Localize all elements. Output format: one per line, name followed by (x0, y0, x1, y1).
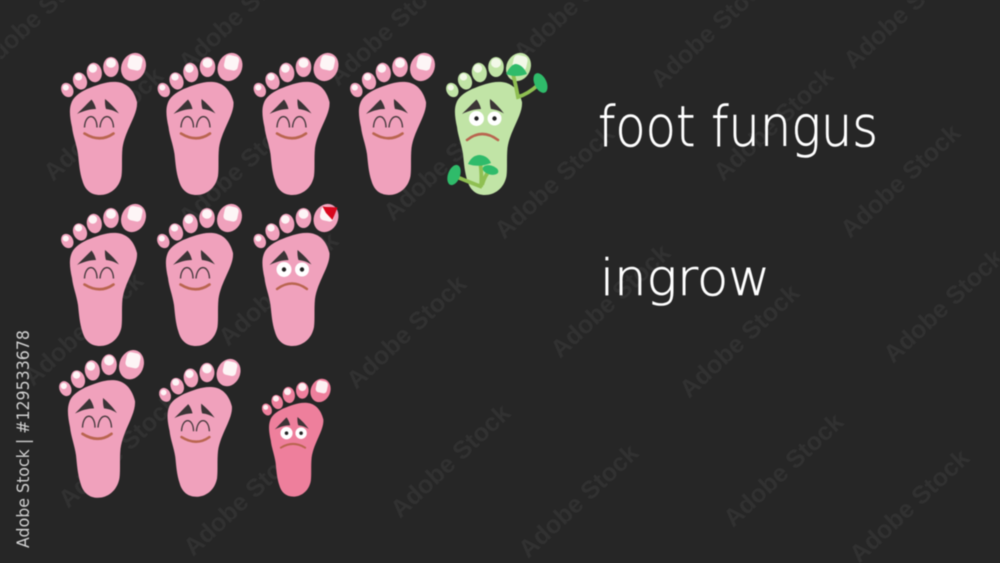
watermark pattern: Adobe Stock (674, 279, 805, 403)
label: foot fungus: foot fungus (598, 95, 878, 160)
foot row 2 column 2: happy (155, 200, 247, 346)
watermark pattern: Adobe Stock (545, 239, 676, 363)
foot row 2 column 1: happy (59, 200, 151, 346)
foot row 1 column 1: happy (59, 49, 151, 195)
watermark pattern: Adobe Stock (53, 389, 184, 513)
watermark pattern: Adobe Stock (378, 102, 509, 226)
watermark pattern: Adobe Stock (38, 62, 169, 186)
watermark pattern: Adobe Stock (835, 119, 966, 243)
watermark pattern: Adobe Stock (18, 267, 149, 391)
mushroom on big toe (506, 64, 550, 97)
watermark pattern: Adobe Stock (489, 120, 620, 244)
watermark pattern: Adobe Stock (718, 408, 849, 532)
watermark pattern: Adobe Stock (385, 399, 516, 523)
foot row 1 column 4: happy (348, 49, 440, 195)
red nail (322, 206, 338, 220)
foot row 3 column 2: happy (157, 355, 245, 497)
watermark pattern: Adobe Stock (178, 437, 309, 561)
stock id text: Adobe Stock | #129533678 (14, 330, 33, 548)
label: ingrow: ingrow (600, 249, 770, 307)
foot row 1 column 3: happy (251, 49, 343, 195)
small inflamed foot: sad (260, 375, 334, 497)
foot with fungus: green and sad (444, 49, 550, 195)
watermark pattern: Adobe Stock (341, 270, 472, 394)
watermark pattern: Adobe Stock (708, 62, 839, 186)
foot row 1 column 2: happy (155, 49, 247, 195)
watermark pattern: Adobe Stock (513, 439, 644, 563)
watermark pattern: Adobe Stock (213, 227, 344, 351)
watermark pattern: Adobe Stock (173, 107, 304, 231)
mushrooms on heel (445, 155, 499, 187)
foot with ingrown nail: sad (251, 200, 343, 346)
foot row 3 column 1: happy (57, 346, 149, 498)
